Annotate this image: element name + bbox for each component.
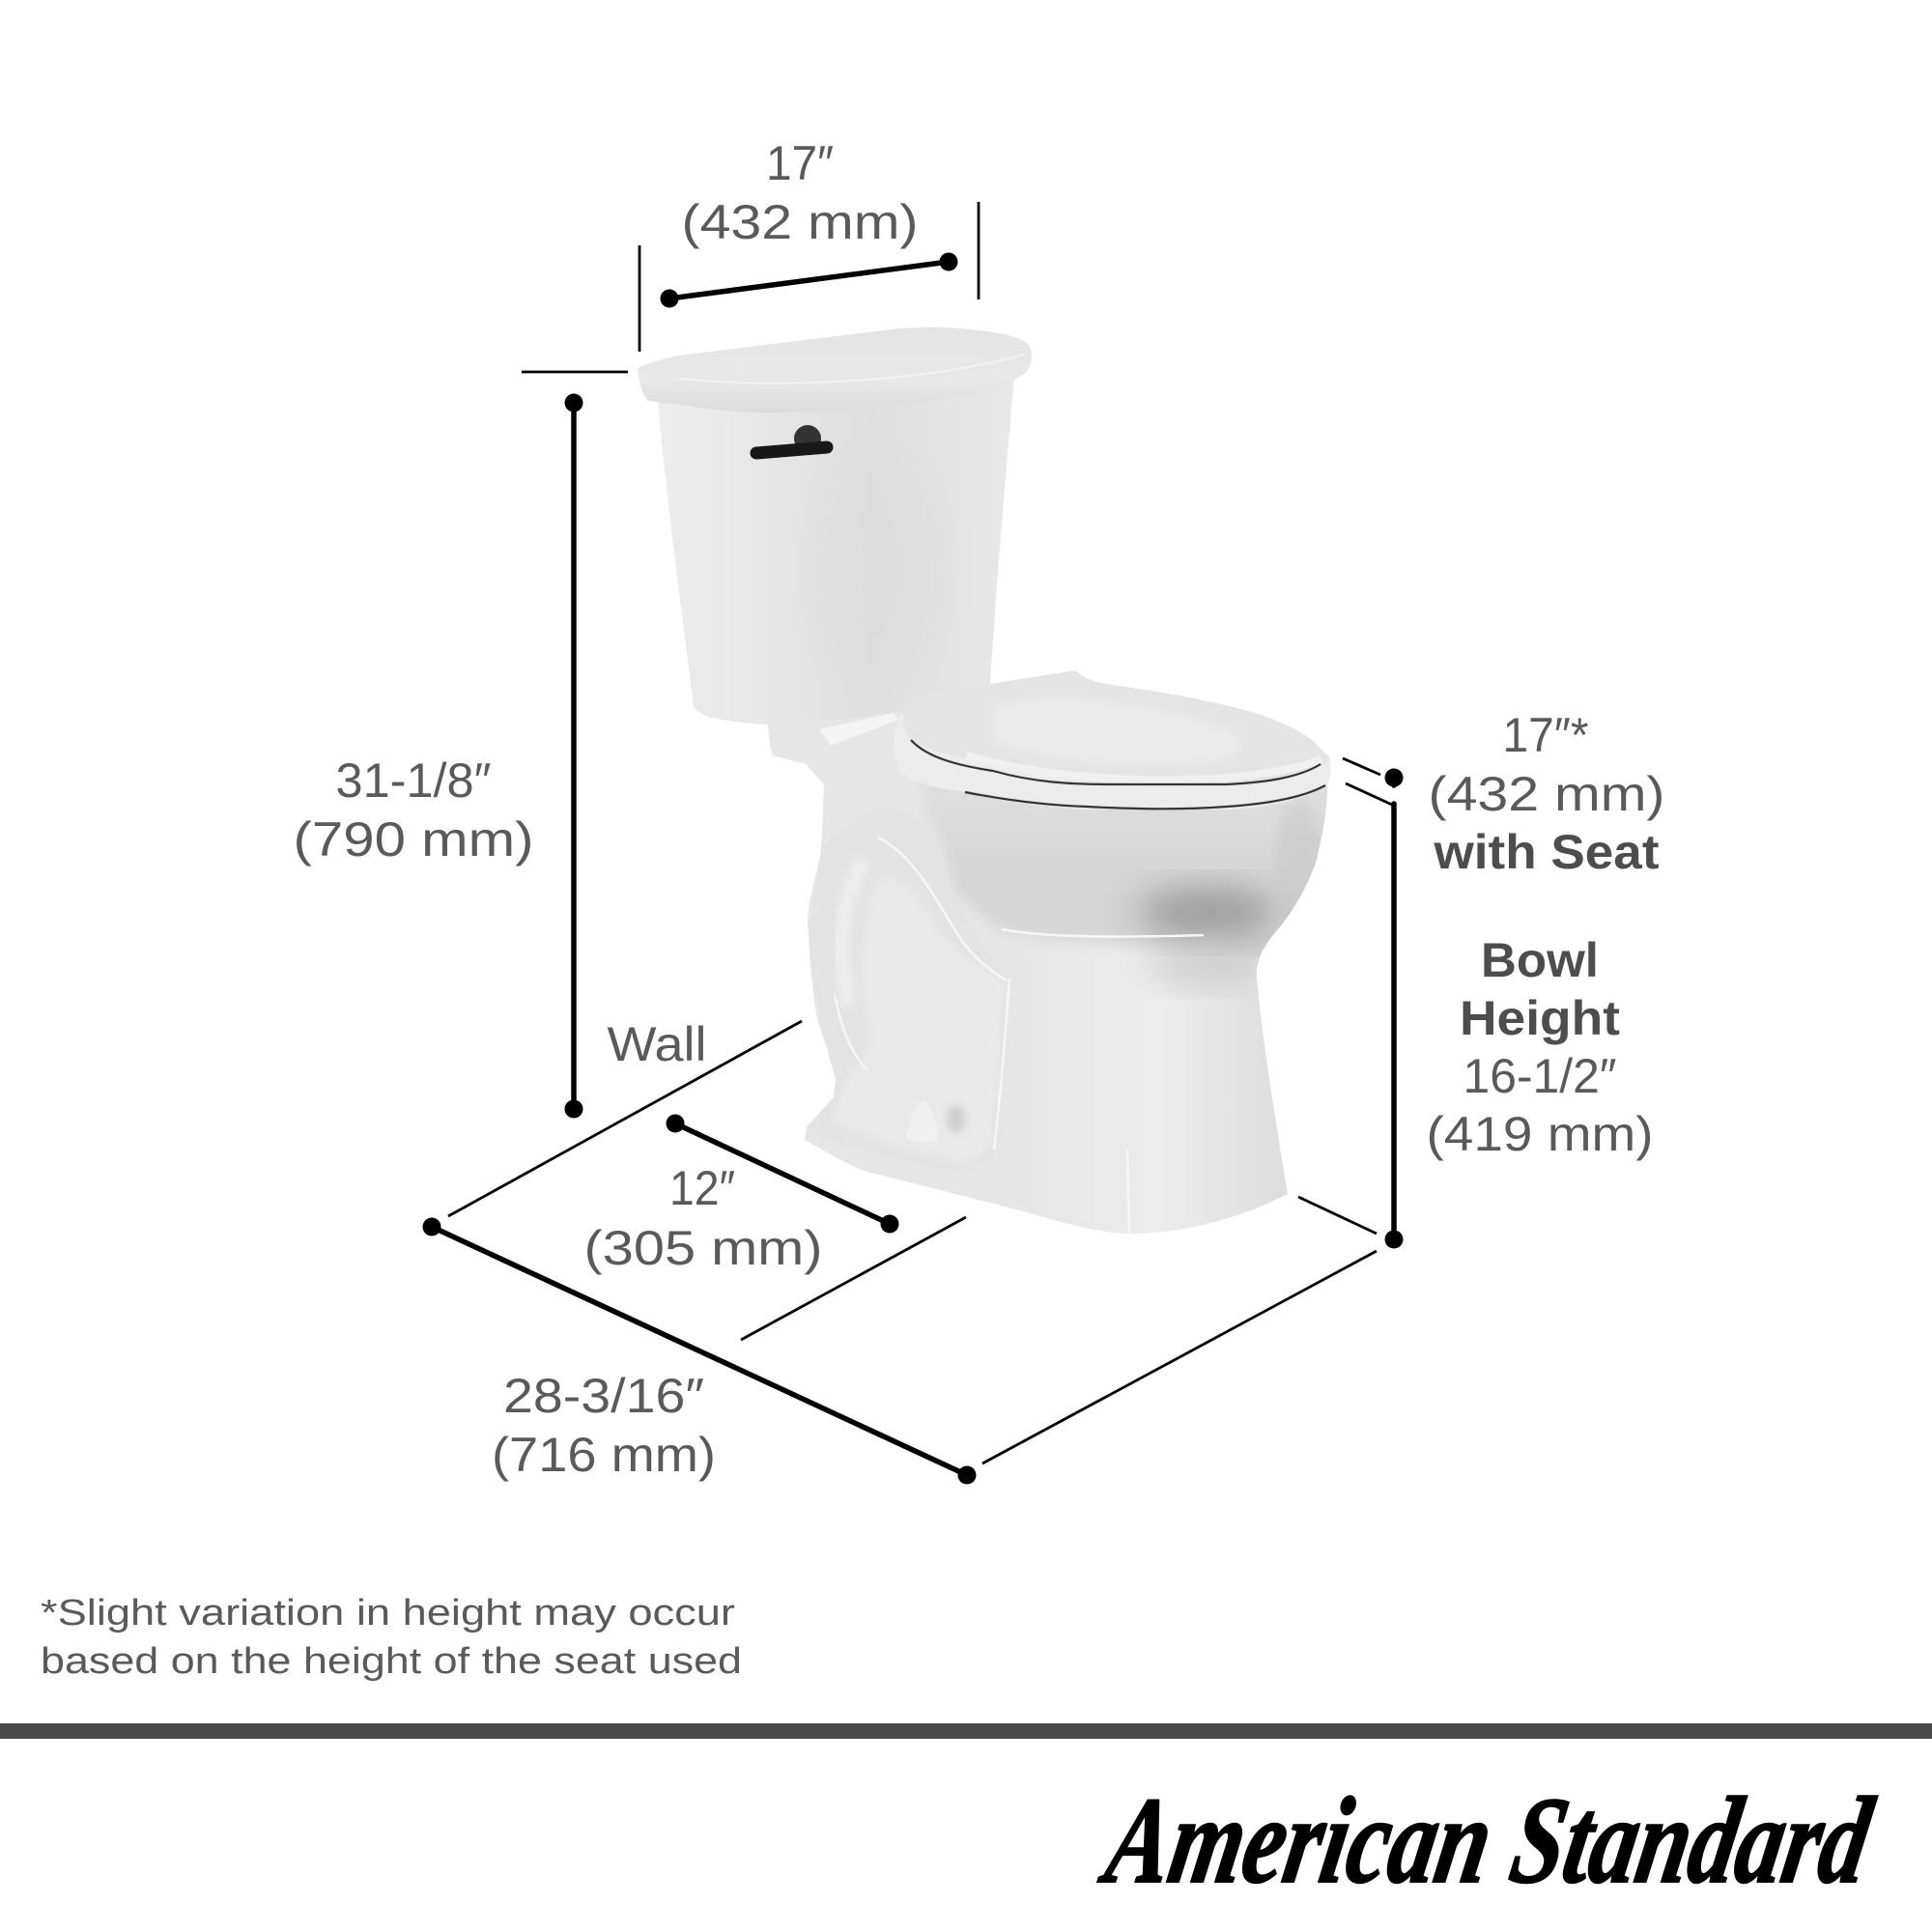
label: wall: Wall bbox=[607, 1017, 707, 1071]
seat gaps bbox=[911, 740, 1325, 809]
label: 17 in: (432 mm) bbox=[682, 195, 918, 249]
tank lid bbox=[638, 327, 1032, 412]
highlights bbox=[835, 838, 1204, 1234]
label: 31-1/8 in bbox=[294, 753, 533, 867]
label: bowl height: 16-1/2″ bbox=[1463, 1049, 1617, 1103]
label: 12 in: (305 mm) bbox=[583, 1221, 823, 1275]
label: with seat height bbox=[1428, 708, 1665, 879]
label: bowl height: Height bbox=[1460, 991, 1620, 1045]
bowl shell and shadows bbox=[930, 790, 1325, 993]
label: bowl height: Bowl bbox=[1481, 933, 1599, 987]
label: with seat height: with Seat bbox=[1433, 825, 1660, 879]
footnote: *Slight variation in height may occur bbox=[41, 1593, 735, 1634]
seat inner lighter panel bbox=[995, 699, 1240, 764]
lid rim highlight bbox=[679, 355, 1024, 384]
tank to bowl flange bbox=[768, 710, 947, 831]
trapway side bbox=[807, 809, 1009, 1172]
label: 31-1/8 in: 31-1/8″ bbox=[336, 753, 491, 808]
bolt cap bbox=[906, 1101, 939, 1142]
footnote bbox=[41, 1593, 742, 1682]
seat lid bbox=[903, 670, 1329, 785]
seat lower rim highlight bbox=[966, 755, 1321, 780]
dimension: overall height 31-1/8 in bbox=[522, 372, 628, 1119]
dimension: rough-in 12 in bbox=[667, 1115, 966, 1340]
dimension: tank width 17 in bbox=[639, 202, 979, 352]
tank center shade bbox=[811, 454, 947, 686]
trap raised edge bbox=[842, 862, 865, 1005]
toilet tank bbox=[658, 377, 1014, 725]
bowl and base body bbox=[805, 753, 1327, 1234]
footnote: based on the height of the seat used bbox=[41, 1641, 742, 1682]
bolt shadow bbox=[947, 1105, 966, 1132]
label: 17 in: 17″ bbox=[766, 136, 834, 190]
label: with seat height: (432 mm) bbox=[1428, 767, 1665, 821]
label: 31-1/8 in: (790 mm) bbox=[294, 812, 533, 867]
label: 12 in: 12″ bbox=[669, 1161, 735, 1215]
label: bowl height bbox=[1426, 933, 1654, 1161]
label: with seat height: 17″* bbox=[1503, 708, 1588, 762]
trap cavity bbox=[831, 878, 1006, 1164]
divider bar bbox=[0, 1723, 1932, 1739]
label: 28-3/16 in: (716 mm) bbox=[492, 1428, 716, 1482]
seat ring bbox=[894, 676, 1331, 810]
illustration: two-piece toilet bbox=[638, 327, 1343, 1234]
dimension: bowl height bbox=[1298, 758, 1403, 1248]
flush handle bbox=[756, 425, 827, 453]
flange highlight bbox=[819, 713, 898, 746]
dimension: overall depth 28-3/16 in bbox=[423, 1217, 1377, 1484]
label: 12 in bbox=[583, 1161, 823, 1275]
label: 28-3/16 in: 28-3/16″ bbox=[503, 1369, 704, 1423]
label: 28-3/16 in bbox=[492, 1369, 716, 1482]
wall reference line bbox=[448, 1021, 802, 1216]
label: bowl height: (419 mm) bbox=[1426, 1107, 1654, 1161]
label: 17 in bbox=[682, 136, 918, 249]
